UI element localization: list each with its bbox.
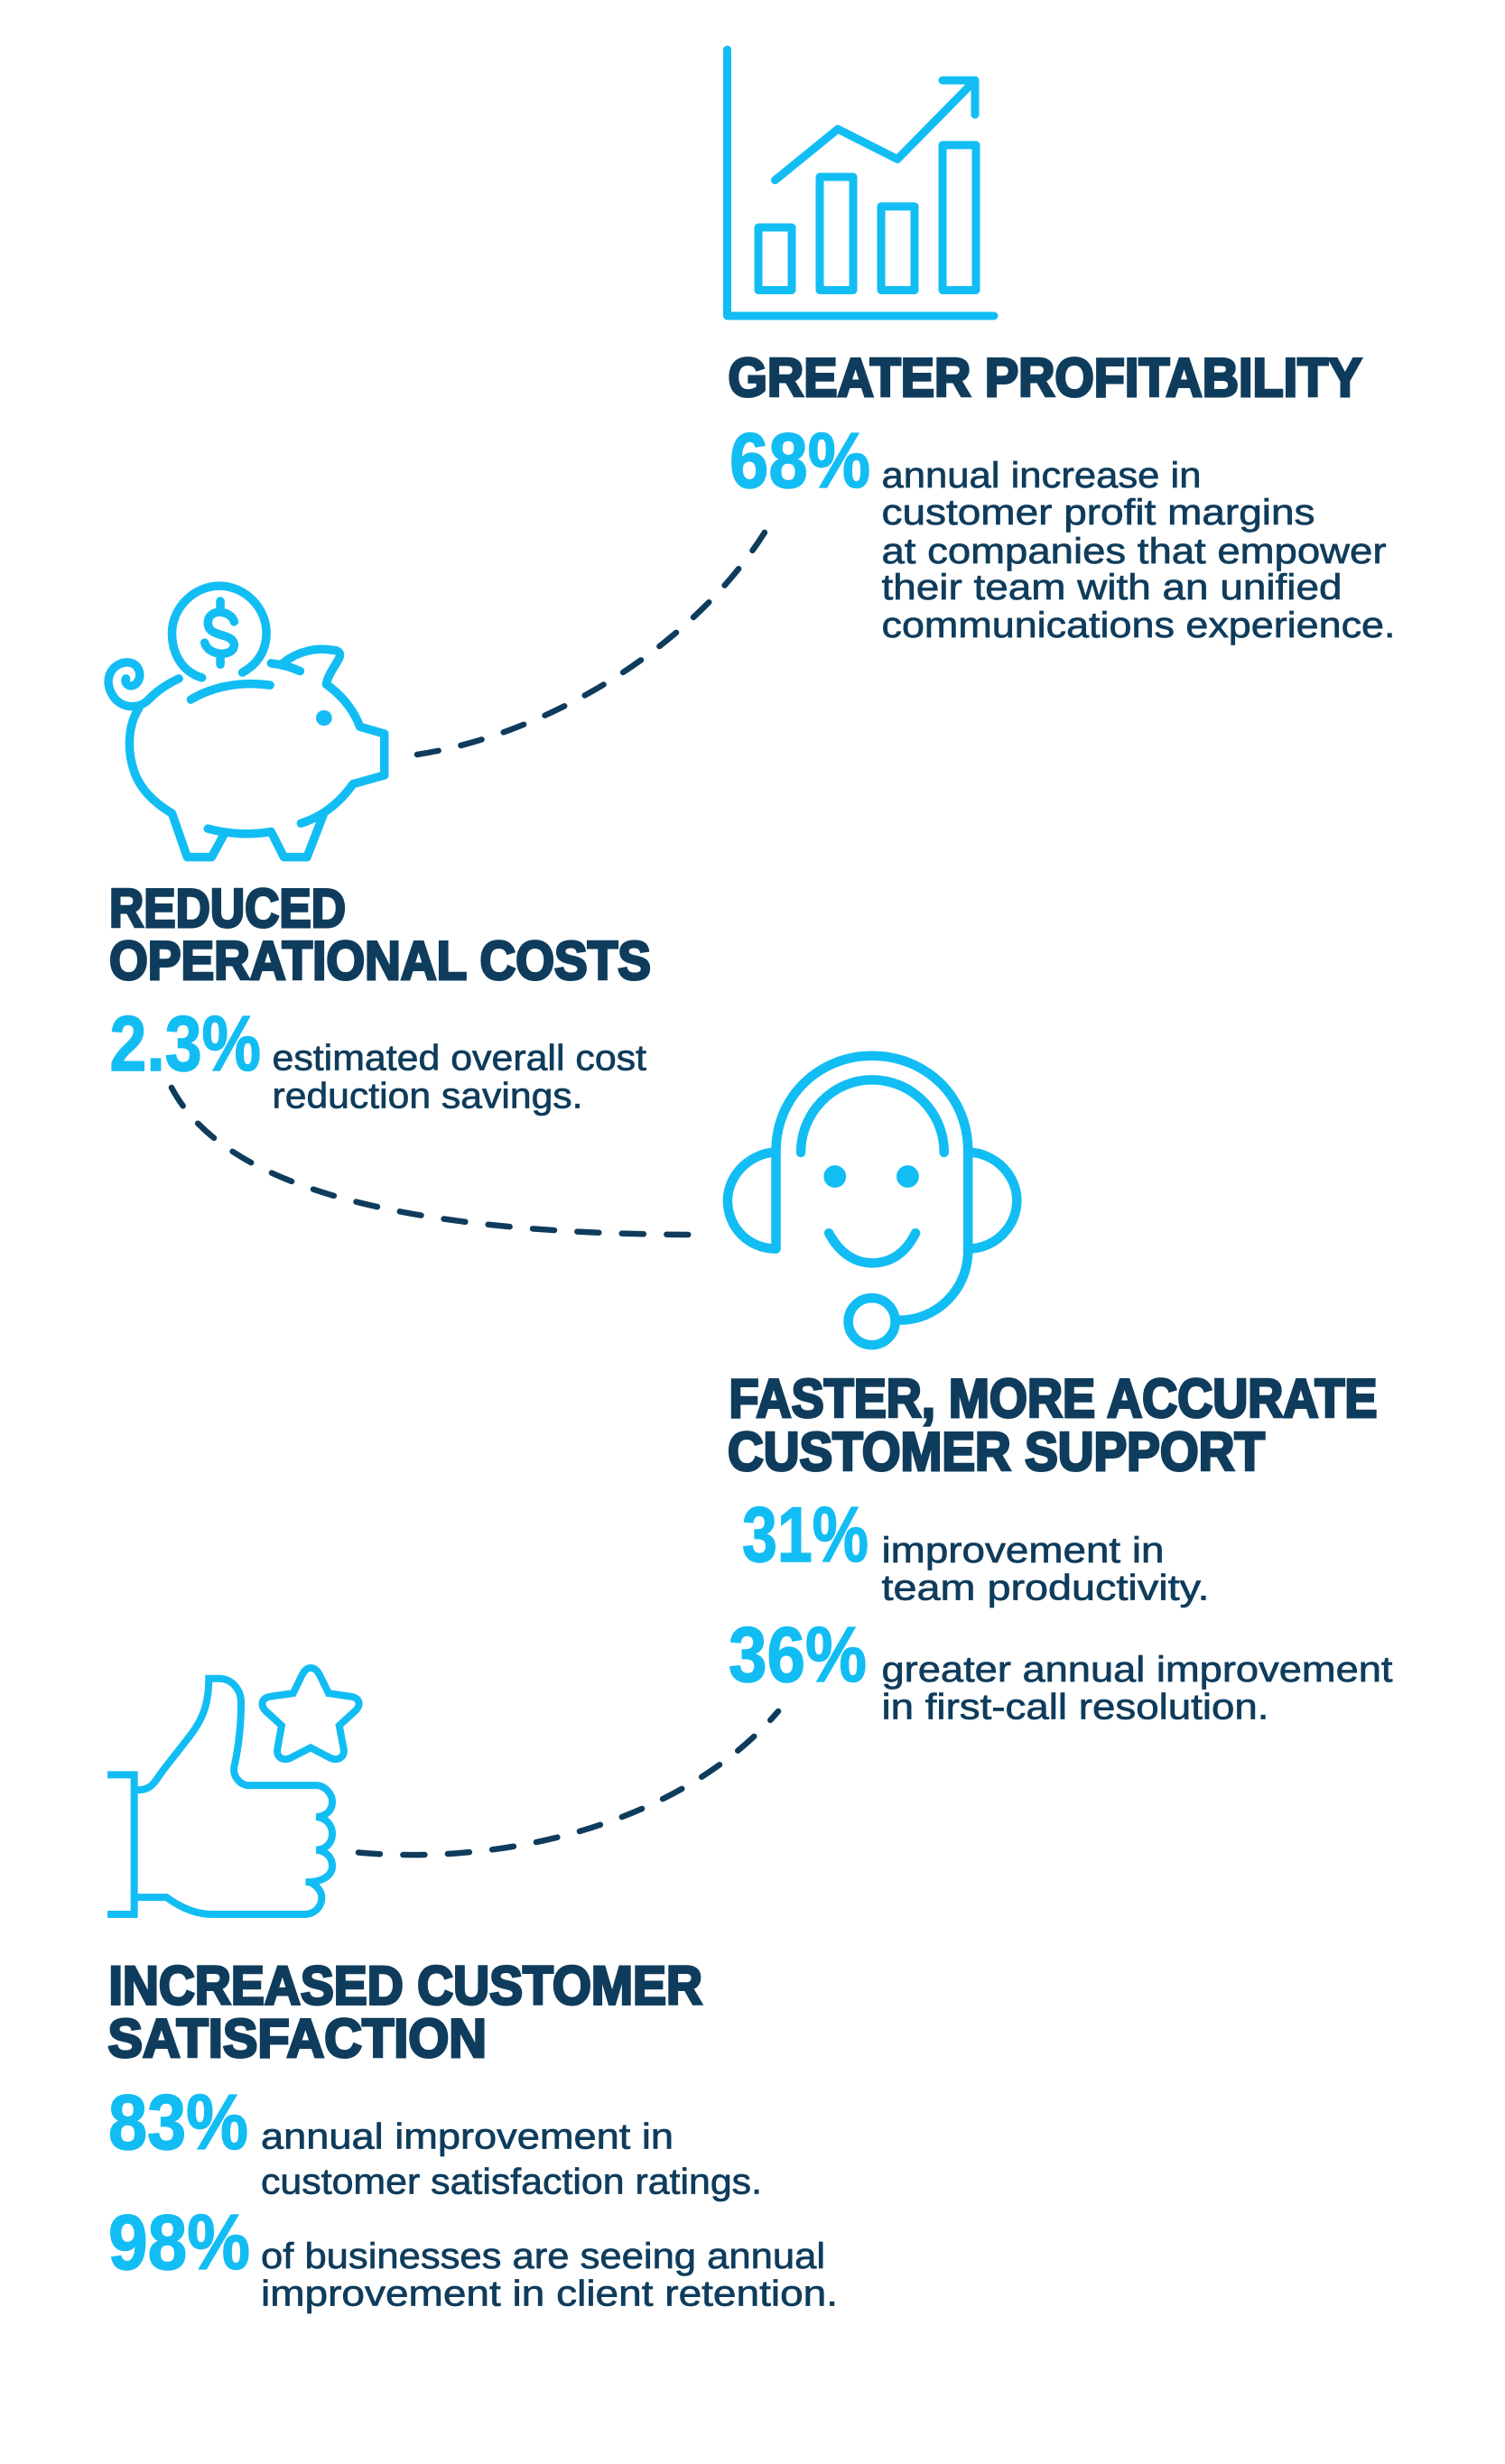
text block: profit margins description: communications experience. xyxy=(881,606,1396,645)
stat: 98%: 98% xyxy=(108,2200,250,2286)
heading: faster, more accurate customer support: CUSTOMER SUPPORT xyxy=(728,1422,1265,1482)
panel: reduced operational costs xyxy=(108,586,651,1116)
panel: faster, more accurate customer support xyxy=(728,1056,1392,1728)
text block: satisfaction ratings description: annual improvement in xyxy=(261,2117,674,2157)
stat: 68%: 68% xyxy=(729,418,870,505)
text block: profit margins description xyxy=(881,456,1396,645)
arrow: dashed connector from customer support to thumbs up xyxy=(358,1711,778,1855)
icon: thumbs up with star xyxy=(107,1668,359,1914)
stat: 31%: 31% xyxy=(742,1492,869,1579)
heading: increased customer satisfaction xyxy=(108,1955,702,2069)
text block: profit margins description: customer profit margins xyxy=(881,493,1315,533)
stat: 83%: 83% xyxy=(108,2080,248,2166)
stat: 2.3%: 2.3% xyxy=(110,1001,261,1088)
text block: cost reduction description xyxy=(273,1039,646,1116)
heading: faster, more accurate customer support: FASTER, MORE ACCURATE xyxy=(729,1368,1378,1429)
text block: team productivity description: team productivity. xyxy=(881,1569,1210,1608)
panel: greater profitability xyxy=(728,50,1396,645)
text block: team productivity description xyxy=(881,1531,1210,1608)
text block: profit margins description: their team with an unified xyxy=(881,568,1342,607)
heading: increased customer satisfaction: INCREASED CUSTOMER xyxy=(108,1955,702,2016)
text block: team productivity description: improvement in xyxy=(881,1531,1165,1570)
heading: reduced operational costs xyxy=(109,878,651,991)
panel: increased customer satisfaction xyxy=(107,1668,838,2314)
text block: satisfaction ratings description: customer satisfaction ratings. xyxy=(261,2163,762,2202)
stat: 36%: 36% xyxy=(729,1612,867,1699)
arrow: dashed connector from operational costs to headset xyxy=(172,1088,701,1235)
heading: reduced operational costs: REDUCED xyxy=(109,878,346,939)
icon: piggy bank with dollar coin xyxy=(108,586,385,857)
text block: first-call resolution description: in first-call resolution. xyxy=(881,1688,1269,1728)
heading: faster, more accurate customer support xyxy=(728,1368,1378,1482)
text block: profit margins description: annual increase in xyxy=(881,456,1201,496)
icon: smiling face with headset xyxy=(728,1056,1017,1345)
text block: satisfaction ratings description xyxy=(261,2117,762,2202)
text block: first-call resolution description: greater annual improvement xyxy=(881,1650,1392,1690)
heading: increased customer satisfaction: SATISFACTION xyxy=(108,2008,487,2069)
text block: client retention description: improvement in client retention. xyxy=(261,2274,838,2314)
text block: cost reduction description: estimated overall cost xyxy=(273,1039,646,1079)
text block: profit margins description: at companies that empower xyxy=(881,532,1387,571)
heading: greater profitability: GREATER PROFITABILITY xyxy=(728,347,1361,408)
text block: cost reduction description: reduction savings. xyxy=(273,1076,583,1116)
text block: first-call resolution description xyxy=(881,1650,1392,1728)
text block: client retention description xyxy=(261,2237,838,2314)
heading: reduced operational costs: OPERATIONAL COSTS xyxy=(109,931,651,991)
text block: client retention description: of businesses are seeing annual xyxy=(261,2237,825,2276)
arrow: dashed connector from profitability to piggy bank xyxy=(417,523,770,755)
icon: bar chart with rising arrow xyxy=(728,50,994,316)
